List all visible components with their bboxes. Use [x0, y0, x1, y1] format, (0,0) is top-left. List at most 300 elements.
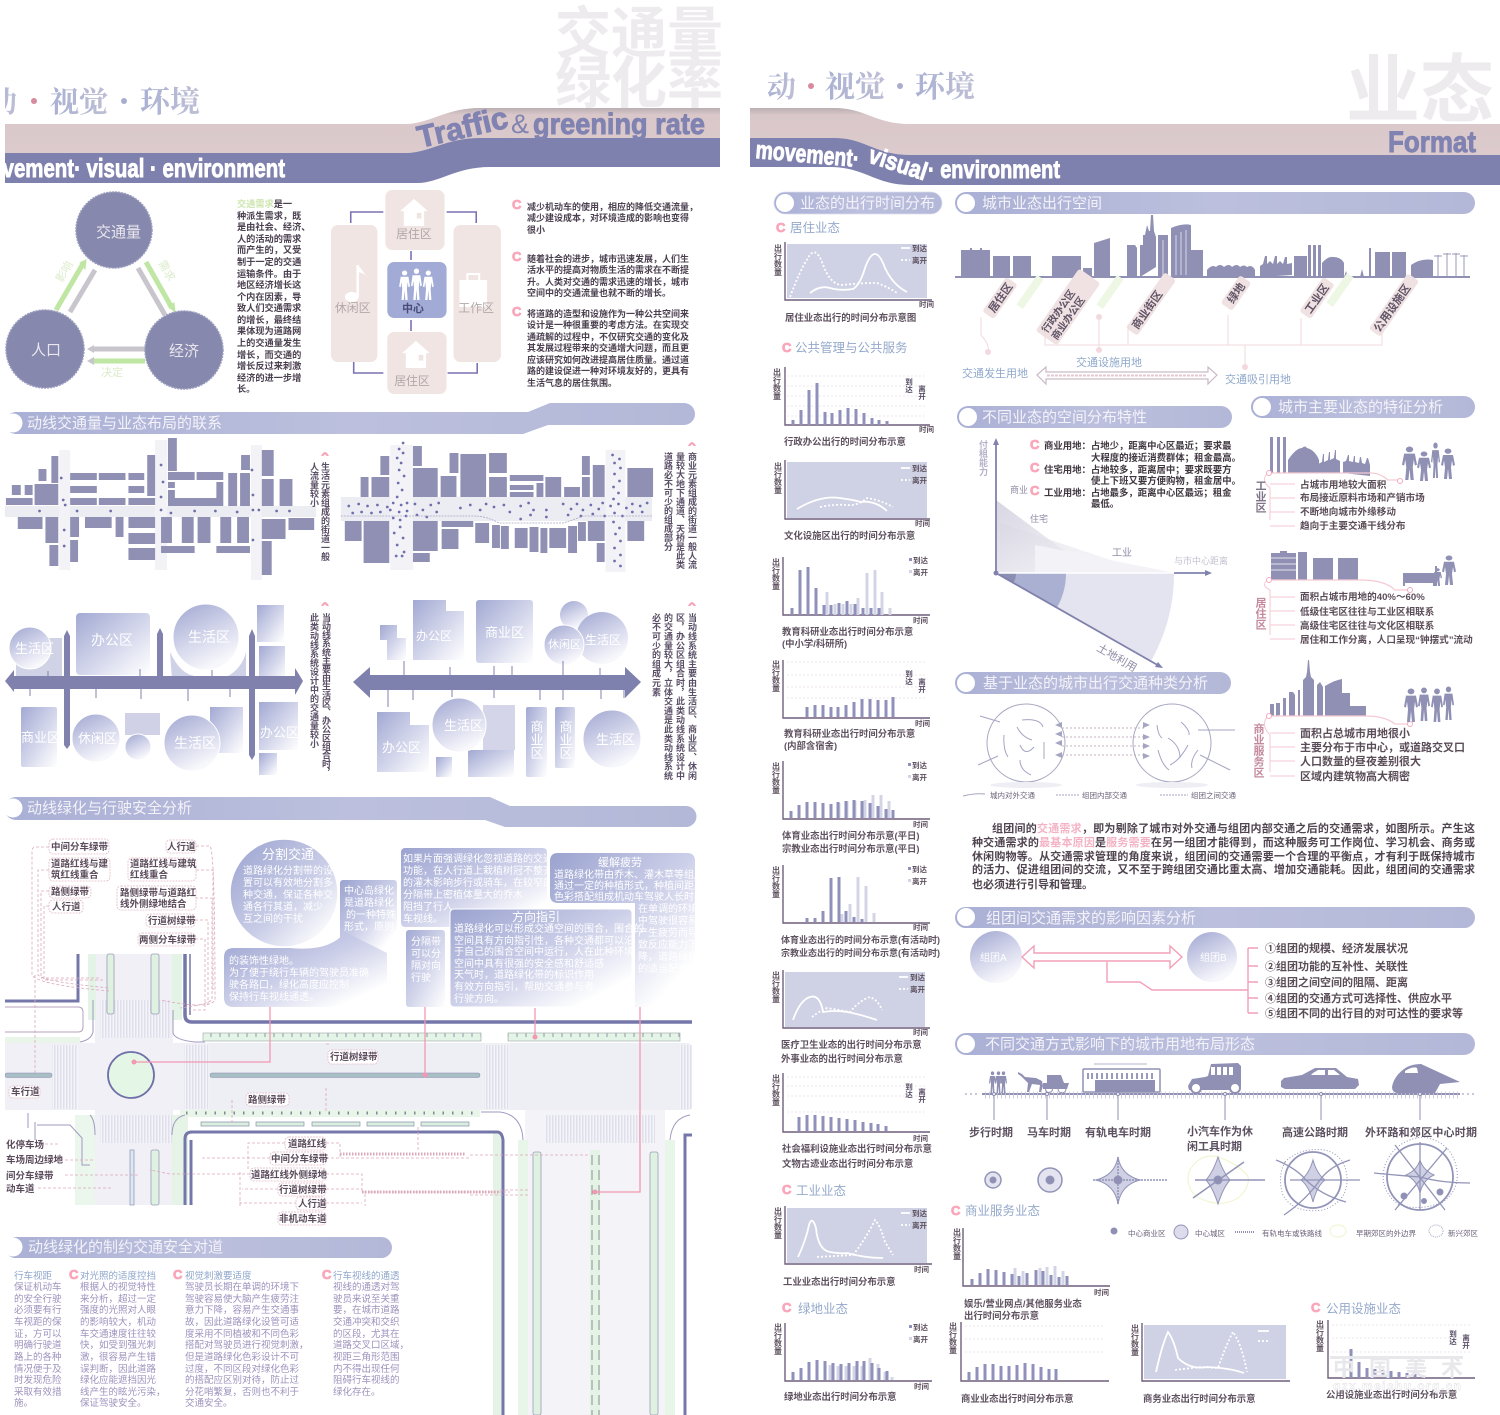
- road labels: 路侧绿带与道路红: [120, 887, 197, 899]
- banner left: greening rate: [533, 108, 705, 141]
- chart: public utilities: 到达: [1448, 1329, 1458, 1346]
- chart: culture facilities: 时间: [915, 518, 930, 528]
- chart: sport event: 出行数量: [772, 865, 780, 898]
- dashed leader lines: [32, 846, 590, 1218]
- chart: education with dorm: 教育科研业态出行时间分布示意: [784, 728, 915, 739]
- page title left: 动·视觉·环境: 视觉: [50, 86, 108, 119]
- timeline: transport eras: 步行时期: [969, 1125, 1013, 1139]
- text: traffic demand definition: 交通需求是一: [237, 198, 292, 209]
- paragraph: inter-cluster traffic demand: 休闲购物等。从交通需求管理的角度来说，组团间的交通需要一个合理的平衡点，才有利于既保持城市: [972, 849, 1475, 863]
- bullet text: right intro paragraphs: 升。人类对交通的需求迅速的增长，城市: [527, 276, 689, 287]
- text: moderate light control: 保证驾驶安全。: [80, 1397, 147, 1409]
- zoning diagram: commercial axis: 生活区: [596, 732, 635, 747]
- text: land use characteristics: 工业用地：占地最多，距离中心区最远；租金: [1044, 487, 1232, 499]
- chart: culture facilities: 出行数量: [774, 461, 782, 494]
- chart: social welfare: 到达: [904, 1082, 914, 1099]
- card: 缓解疲劳: 色彩搭配组成机动车驾驶人长时间: [554, 890, 704, 903]
- chart: bid-rent spatial distribution: 住宅: [1030, 513, 1048, 524]
- card: 中心岛 续: [224, 932, 387, 1007]
- text: clear sight lines: 视线的通透对驾: [333, 1281, 400, 1293]
- chart: residential travel time: 居住业态出行的时间分布示意图: [785, 312, 916, 323]
- chart: industry: [774, 1206, 932, 1287]
- bullet text: right intro paragraphs: 其发展过程带来的交通增大问题，而且更: [527, 342, 689, 353]
- chart: education with dorm: 到达: [904, 669, 914, 686]
- icon: tram: [1083, 1064, 1160, 1092]
- residential zone analysis: 面积占城市用地的40%～60%: [1300, 591, 1425, 603]
- text: sight distance: 必须要有行: [14, 1304, 62, 1316]
- card: 片面强调绿化: [401, 848, 553, 927]
- vertical note: commercial street: [663, 442, 697, 570]
- section heading: 组团间交通需求的影响因素分析: [955, 907, 1475, 928]
- chart: sport weekday: 时间: [913, 819, 928, 829]
- building lines: [5, 954, 692, 1415]
- tag: utilities: 公用设施区: [1370, 281, 1413, 334]
- bullet text: right intro paragraphs: 将道路的造型和设施作为一种公共空间来: [527, 308, 689, 319]
- chart: entertainment and services: 娱乐/营业网点/其他服务业态: [964, 1298, 1082, 1309]
- vertical note: commercial street: 商业元素组成的街道一般人流: [687, 451, 697, 570]
- chart: sport event: 体育业态出行的时间分布示意(有活动时): [781, 934, 940, 945]
- page title right: 动·视觉·环境: 视觉: [825, 71, 885, 104]
- tag: green: [1221, 275, 1251, 311]
- subhead: 公共管理与公共服务: 公共管理与公共服务: [795, 340, 908, 355]
- diagram: cluster A-B influence: 组团B: [1200, 951, 1227, 964]
- chart: education: (中小学/科研所): [782, 638, 847, 649]
- commercial zone analysis: 商业服务区: [1252, 722, 1264, 778]
- text: traffic demand definition: 而产生的，又受: [237, 244, 301, 255]
- chart: business: [1130, 1323, 1290, 1404]
- watermark: qzx.meishu.org.cn: [1333, 1379, 1461, 1393]
- chart: public utilities: 公用设施业态出行时间分布示意: [1326, 1389, 1457, 1400]
- vertical note: commercial axis: 必不可少的组成元素: [651, 612, 661, 697]
- text: traffic demand definition: 长。: [237, 383, 255, 394]
- card: 中心岛绿化: 中心岛绿化: [344, 884, 394, 897]
- icon: modern car: [1281, 1068, 1359, 1089]
- chart: public utilities: [1316, 1319, 1475, 1400]
- chart: residential travel time: [774, 242, 934, 323]
- chart: administrative office: 出行数量: [772, 367, 782, 400]
- card: 中心岛绿化: 是道路绿化: [344, 896, 394, 909]
- road labels: 动车道: [6, 1183, 35, 1195]
- road labels: 人行道: [52, 901, 81, 913]
- subhead: 公用设施业态: C: [1311, 1300, 1321, 1315]
- road labels: 人行道: [167, 841, 196, 853]
- chart: medical: 医疗卫生业态的出行时间分布示意: [781, 1039, 922, 1050]
- chart: public utilities: 离开: [1461, 1333, 1470, 1350]
- text: moderate visual stimulation: 分花哨繁复，否则也不利于: [185, 1386, 299, 1398]
- section heading: 不同交通方式影响下的城市用地布局形态: 不同交通方式影响下的城市用地布局形态: [985, 1035, 1255, 1053]
- diagram: cluster A-B influence: 组团A: [980, 951, 1007, 964]
- card: 分割交通: 通各行其道，减少: [243, 900, 323, 913]
- text: moderate visual stimulation: [173, 1267, 309, 1409]
- form: outer ring: [1374, 1137, 1470, 1210]
- section heading: 不同业态的空间分布特性: 不同业态的空间分布特性: [982, 409, 1147, 426]
- industrial zone analysis: 不断地向城市外缘移动: [1300, 506, 1396, 518]
- subhead: 公用设施业态: 公用设施业态: [1326, 1301, 1401, 1316]
- white mask below plan left: [0, 1206, 490, 1415]
- chart: culture facilities: [774, 460, 930, 541]
- chart: residential travel time: 到达: [912, 243, 927, 253]
- text: land use characteristics: 住宅用地：占地较多，距离居中；要求既要方: [1044, 464, 1232, 476]
- road labels: 中间分车绿带: [51, 841, 109, 853]
- diagram: traffic, population, economy triangle: 人口: [31, 342, 61, 359]
- vertical note: commercial street: 量较大地下通道、天桥是此类: [675, 452, 685, 570]
- section heading: 业态的出行时间分布: [774, 192, 942, 214]
- chart: green space: 时间: [914, 1381, 929, 1391]
- text: clear sight lines: 内不得出现任何: [333, 1363, 400, 1375]
- paragraph: inter-cluster traffic demand: [972, 821, 1475, 891]
- timeline: transport eras: 小汽车作为休: [1187, 1124, 1253, 1138]
- land use tags: [982, 268, 1419, 346]
- diagram: cluster A-B influence: ②组团功能的互补性、关联性: [1265, 959, 1408, 973]
- road labels: 中间分车绿带: [271, 1153, 329, 1165]
- tag: commercial street: 商业街区: [1129, 288, 1165, 332]
- timeline: transport eras: [965, 1063, 1477, 1153]
- card: 分隔带: 行驶: [411, 971, 431, 984]
- card: 方向指引: [450, 909, 644, 1007]
- diagram: cluster A-B influence: [970, 931, 1463, 1020]
- commercial zone analysis: [1252, 660, 1465, 783]
- road labels: 车行道: [11, 1086, 40, 1098]
- land use connection lines and labels: 交通吸引用地: [1225, 372, 1291, 386]
- road labels: 线外侧绿地结合: [120, 898, 187, 910]
- chart: sport weekday: 出行数量: [772, 761, 780, 794]
- road surface: [5, 954, 692, 1415]
- subhead: 绿地业态: [782, 1300, 848, 1316]
- chart: culture facilities: 文化设施区出行的时间分布示意: [784, 530, 915, 541]
- paragraph: inter-cluster traffic demand: 种交通需求的最基本原因是服务需要在另一组团才能得到，而这种服务可工作岗位、学习机会、商务或: [972, 835, 1475, 849]
- chart: commerce: [948, 1321, 1109, 1404]
- land use connection lines and labels: [962, 314, 1382, 386]
- chart: industry: 时间: [914, 1264, 929, 1274]
- paragraph: inter-cluster traffic demand: 也必须进行引导和管理。: [972, 877, 1093, 891]
- chart: entertainment and services: [952, 1227, 1110, 1321]
- land use connection lines and labels: 交通发生用地: [962, 366, 1028, 380]
- zoning diagram: commercial axis: 办公区: [416, 628, 452, 643]
- vertical note: residential street: [309, 452, 330, 562]
- text: moderate visual stimulation: 交通安全。: [185, 1397, 233, 1409]
- text: sight distance: 采取有效措: [14, 1386, 62, 1398]
- zoning diagram: living + office axis: 办公区: [260, 725, 299, 740]
- vertical note: commercial axis: 区，办公区组合时，此类动线系统设计中: [675, 613, 685, 781]
- card: 方向指引: 空间具有方向指引性，各种交通都可以沿: [454, 934, 634, 947]
- block plan: commercial street: [341, 443, 653, 572]
- card: 缓解疲劳: 产生疲劳而导: [638, 926, 698, 939]
- bullet text: right intro paragraphs: 设计是一种很重要的考虑方法。在实现交: [527, 319, 689, 330]
- paragraph: inter-cluster traffic demand: 的活力、促进组团间的交流，又不至于跨组团交通比重太高、增加交通能耗。因此，组团间的交通需求: [972, 862, 1475, 876]
- timeline: transport eras: 有轨电车时期: [1085, 1125, 1151, 1139]
- subhead: 工业业态: 工业业态: [796, 1184, 846, 1198]
- commercial zone analysis: 面积占总城市用地很小: [1300, 726, 1410, 740]
- chart: sport weekday: 离开: [912, 772, 927, 782]
- text: traffic demand definition: 致人们交通需求: [237, 302, 301, 313]
- text: moderate light control: 的影响较大，机动: [80, 1316, 156, 1328]
- chart: business: 出行数量: [1130, 1323, 1140, 1356]
- chart: social welfare: 社会福利设施业态出行时间分布示意: [782, 1143, 932, 1154]
- vertical note: residential street: 生活元素组成的街道一般: [320, 461, 330, 562]
- card: 片面强调绿化: 分隔带上密植体量大的乔木: [403, 888, 523, 901]
- card: 缓解疲劳: 在单调的环境: [638, 902, 698, 915]
- chart: education: [772, 555, 930, 649]
- card: 方向指引: 方向指引: [512, 909, 560, 924]
- banner right: · environment: [928, 156, 1061, 184]
- road plan: [5, 846, 692, 1415]
- zoning diagram: commercial axis: 生活区: [585, 633, 621, 647]
- ghost title: 交通量 绿化率: [555, 2, 723, 115]
- vertical note: commercial axis: [651, 602, 697, 781]
- card: 缓解疲劳: 道路绿化带由乔木、灌木草等组成: [554, 868, 704, 881]
- section heading: 动线绿化与行驶安全分析: [4, 797, 696, 827]
- text: sight distance: 行车视距: [14, 1270, 53, 1282]
- text: clear sight lines: 阻碍行车视线的: [333, 1374, 400, 1386]
- bullet text: right intro paragraphs: C: [512, 304, 522, 319]
- text: moderate light control: 快，如受到强光刺: [80, 1339, 156, 1351]
- text: clear sight lines: 道路交叉口区域，: [333, 1339, 409, 1351]
- card: 片面强调绿化: 阻挡了行人: [403, 900, 453, 913]
- road labels: 行道树绿带: [330, 1051, 378, 1063]
- text: moderate visual stimulation: 但是道路绿化色彩设计不可: [185, 1351, 299, 1363]
- diagram: cluster travel types: 城内对外交通: [990, 790, 1035, 800]
- card: 缓解疲劳: [550, 853, 704, 1007]
- chart: public utilities: 出行数量: [1316, 1319, 1324, 1352]
- chart: bid-rent spatial distribution: [978, 438, 1228, 675]
- chart: residential travel time: 离开: [912, 255, 927, 265]
- bullet text: right intro paragraphs: 生活气息的居住氛围。: [527, 377, 617, 388]
- card: 中心岛 续: 的装饰性绿地。: [229, 954, 299, 967]
- road labels: 筑红线重合: [51, 869, 99, 881]
- section heading: 动线绿化与行驶安全分析: 动线绿化与行驶安全分析: [27, 799, 192, 817]
- chart: residential travel time: 时间: [919, 299, 934, 309]
- paragraph: inter-cluster traffic demand: 组团间的交通需求，即为剔除了城市对外交通与组团内部交通之后的交通需求，如图所示。产生这: [992, 821, 1475, 835]
- text: sight distance: 证，方可以: [14, 1328, 62, 1340]
- text: moderate light control: 误判断，因此道路: [80, 1363, 157, 1375]
- text: traffic demand definition: 果体现为道路网: [237, 325, 301, 336]
- chart: administrative office: 行政办公出行的时间分布示意: [784, 436, 906, 447]
- zoning diagram: living + office axis: 休闲区: [78, 731, 117, 746]
- text: land use characteristics: 商业用地：占地少，距离中心区最近；要求最: [1044, 440, 1232, 452]
- chart: medical: 离开: [910, 984, 925, 994]
- zoning diagram: living + office axis: 商业区: [21, 730, 60, 745]
- section heading: 城市业态出行空间: [955, 192, 1475, 214]
- card: 分隔带: 可以分: [411, 948, 441, 960]
- right road fragments above mask: [493, 1206, 503, 1415]
- text: moderate visual stimulation: 驾驶容易使大脑产生疲劳注: [185, 1293, 300, 1305]
- chart: education: 时间: [913, 615, 928, 625]
- icon: high speed train: [1392, 1064, 1460, 1093]
- text: traffic demand definition: 制于一定的交通: [237, 256, 301, 267]
- text: clear sight lines: 行车视线的通透: [333, 1270, 400, 1282]
- banner right: Format: [1388, 126, 1476, 159]
- text: moderate light control: 线产生的眩光污染，: [80, 1386, 166, 1398]
- chart: administrative office: [772, 367, 934, 447]
- road labels: [6, 839, 378, 1225]
- text: traffic demand definition: 是由社会、经济、: [237, 221, 310, 232]
- card: 中心岛绿化: 的一种特殊: [346, 908, 396, 921]
- bullet text: right intro paragraphs: C: [512, 197, 522, 212]
- page title right: 动·视觉·环境: [767, 71, 975, 104]
- residential zone analysis: 高级住宅区往往与文化区相联系: [1300, 620, 1435, 632]
- chart: social welfare: 文物古迹业态出行时间分布示意: [782, 1158, 913, 1169]
- card: 片面强调绿化: 的灌木影响步行或骑车，在较窄的: [403, 876, 553, 889]
- chart: green space: 离开: [913, 1334, 928, 1344]
- road labels: 道路红线与建: [51, 858, 109, 870]
- card: 分隔带: [406, 930, 445, 1007]
- page title left: 动·视觉·环境: [5, 86, 200, 115]
- road labels: 道路红线: [288, 1138, 327, 1150]
- text: traffic demand definition: 上的交通量发生: [237, 337, 301, 348]
- text: sight distance: [14, 1270, 62, 1409]
- text: moderate visual stimulation: C: [173, 1267, 183, 1282]
- bullet text: right intro paragraphs: 路的建设促进一种对环境友好的，更具有: [527, 365, 689, 376]
- subhead: 商业服务业态: C: [951, 1203, 961, 1218]
- text: moderate light control: C: [69, 1267, 79, 1282]
- diagram: traffic, population, economy triangle: 交通量: [96, 223, 141, 241]
- chart: green space: 出行数量: [774, 1322, 782, 1355]
- section heading: 基于业态的城市出行交通种类分析: [955, 672, 1231, 694]
- text: moderate visual stimulation: 视觉刺激要适度: [185, 1270, 252, 1282]
- text: sight distance: 车视距的保: [14, 1316, 62, 1328]
- zoning diagram: commercial axis: 办公区: [382, 740, 421, 755]
- legend: city forms: 有轨电车或铁路线: [1262, 1228, 1322, 1238]
- chart: culture facilities: 离开: [912, 475, 927, 485]
- road labels: 非机动车道: [279, 1213, 327, 1225]
- text: sight distance: 的安全行驶: [14, 1293, 62, 1305]
- card: 缓解疲劳: 致反应能力下: [638, 938, 698, 951]
- text: traffic demand definition: 种派生需求，既: [237, 210, 301, 221]
- diagram: traffic, population, economy triangle: 经济: [169, 343, 199, 360]
- chart: sport weekday: 宗教业态出行时间分布示意(平日): [782, 843, 920, 854]
- chart: social welfare: 离开: [917, 1087, 926, 1104]
- chart: business: 商务业态出行时间分布示意: [1143, 1393, 1256, 1404]
- skyline: [955, 215, 1470, 277]
- section heading: 城市主要业态的特征分析: 城市主要业态的特征分析: [1278, 399, 1443, 416]
- section heading: 动线交通量与业态布局的联系: [4, 403, 695, 434]
- road labels: 道路红线外侧绿地: [251, 1169, 328, 1181]
- chart: education: 教育科研业态出行时间分布示意: [782, 626, 913, 637]
- pink callout leaders: [134, 1007, 640, 1192]
- vertical note: living + office: [309, 602, 331, 776]
- zoning diagram: commercial axis: 商业区: [528, 720, 544, 759]
- banner right: [750, 108, 1500, 186]
- watermark: [1330, 1356, 1463, 1393]
- road labels: 道路红线与建筑: [130, 858, 197, 870]
- industrial zone analysis: 占城市用地较大面积: [1300, 479, 1387, 491]
- card: 缓解疲劳: 缓解疲劳: [598, 855, 642, 869]
- section heading: 城市业态出行空间: 城市业态出行空间: [982, 195, 1102, 212]
- road labels: 化停车场: [6, 1139, 45, 1151]
- text: sight distance: 路上的各种: [14, 1351, 62, 1363]
- card: 分割交通: 置可以有效地分割多: [243, 876, 333, 889]
- tag: industry: 工业区: [1302, 281, 1332, 316]
- text: land use characteristics: C: [1030, 483, 1040, 498]
- text: land use characteristics: C: [1030, 460, 1040, 475]
- tag: commercial street: [1126, 272, 1176, 336]
- road labels: 车场周边绿地: [6, 1154, 64, 1166]
- subhead: 绿地业态: 绿地业态: [798, 1301, 848, 1316]
- chart: social welfare: 出行数量: [772, 1073, 780, 1106]
- section heading: 城市主要业态的特征分析: [1251, 396, 1475, 418]
- city form diagrams: [985, 1137, 1470, 1215]
- block plan: residential street: [5, 438, 316, 580]
- vertical note: residential street: 人流量较小: [309, 462, 319, 508]
- form: carriage city: [1038, 1168, 1062, 1192]
- text: moderate light control: 来分析，超过一定: [80, 1293, 157, 1305]
- timeline: transport eras: 闲工具时期: [1187, 1139, 1242, 1153]
- subhead: 居住业态: 居住业态: [790, 221, 840, 235]
- card: 方向指引: 天气时，道路绿化带的标识作用: [454, 968, 594, 981]
- text: traffic demand definition: 人的活动的需求: [237, 233, 301, 244]
- card: 分割交通: 道路绿化分割带的设: [243, 864, 333, 877]
- vertical note: commercial axis: 的交通量较大，立体交通是此类动线系统: [663, 612, 673, 781]
- text: moderate visual stimulation: 过度，不同区段对绿化色彩: [185, 1363, 300, 1375]
- green strips: [5, 954, 680, 1415]
- diagram: cluster travel types: [963, 704, 1236, 800]
- residential zone analysis: 居住区: [1254, 597, 1266, 630]
- bullet text: right intro paragraphs: 应该研究如何改进提高居住质量。通过道: [527, 354, 689, 365]
- text: land use characteristics: C: [1030, 437, 1040, 452]
- card: 方向指引: 行驶方向。: [454, 992, 504, 1005]
- legend: city forms: [1110, 1225, 1478, 1239]
- card: 缓解疲劳: 的适当配置可: [638, 962, 698, 975]
- diagram: cluster A-B influence: ③组团之间空间的阻隔、距离: [1265, 975, 1408, 989]
- card: 片面强调绿化: 如果片面强调绿化忽视道路的交通: [403, 852, 553, 865]
- zoning diagram: commercial axis: 商业区: [485, 625, 524, 640]
- bullet text: right intro paragraphs: [512, 197, 698, 388]
- card: 中心岛绿化: 形式，原则: [344, 920, 394, 933]
- text: moderate visual stimulation: 度采用不同植被和不同色彩: [185, 1328, 300, 1340]
- chart: bid-rent spatial distribution: 与市中心距离: [1174, 555, 1228, 566]
- section heading: 组团间交通需求的影响因素分析: 组团间交通需求的影响因素分析: [986, 909, 1196, 927]
- chart: industry: 到达: [912, 1208, 927, 1218]
- ghost title: 交通量 绿化率: 交通量: [555, 2, 723, 65]
- subhead: 居住业态: C: [776, 220, 786, 235]
- chart: sport event: 到达: [912, 864, 927, 874]
- industrial zone analysis: 趋向于主要交通干线分布: [1300, 520, 1406, 532]
- tag: offices: [1036, 268, 1100, 346]
- zoning diagram: commercial axis: 商业区: [558, 720, 572, 759]
- zoning diagram: living + office axis: [5, 604, 303, 775]
- text: moderate light control: 根据人的视觉特性: [80, 1281, 157, 1293]
- chart: entertainment and services: 时间: [1094, 1287, 1110, 1297]
- bullet text: right intro paragraphs: 很小: [527, 224, 545, 235]
- text: traffic demand definition: 增长，而交通的: [237, 349, 301, 360]
- page title left: 动·视觉·环境: 环境: [140, 86, 200, 119]
- section heading: 业态的出行时间分布: 业态的出行时间分布: [800, 195, 935, 212]
- card: 方向指引: 空间中具有很强的安全感和舒适感: [454, 957, 604, 970]
- text: sight distance: 情况便于及: [14, 1363, 62, 1375]
- timeline: transport eras: 外环路和郊区中心时期: [1365, 1125, 1477, 1139]
- road labels: 行道树绿带: [148, 915, 196, 927]
- subhead: 商业服务业态: 商业服务业态: [965, 1203, 1040, 1218]
- diagram: cluster A-B influence: ④组团的交通方式可选择性、供应水平: [1265, 991, 1452, 1005]
- text: traffic demand definition: 增长反过来刺激: [237, 360, 301, 371]
- tag: residential: [982, 277, 1018, 319]
- text: land use characteristics: 大程度的接近消费群体；租金最高。: [1091, 452, 1241, 464]
- bullet text: right intro paragraphs: C: [512, 249, 522, 264]
- residential zone analysis: 居住和工作分离，人口呈现“钟摆式”流动: [1300, 634, 1473, 646]
- banner left: [5, 108, 720, 183]
- text: traffic demand definition: 地区经济增长这: [237, 279, 301, 290]
- zoning diagram: living + office axis: 生活区: [174, 735, 216, 751]
- zoning diagram: living + office axis: 生活区: [15, 641, 54, 656]
- section heading: 不同交通方式影响下的城市用地布局形态: [955, 1033, 1475, 1055]
- text: moderate light control: [69, 1267, 166, 1409]
- chart: sport event: [772, 864, 940, 958]
- chart: education with dorm: 时间: [915, 718, 930, 728]
- zoning diagram: commercial axis: 生活区: [444, 718, 483, 733]
- text: moderate visual stimulation: 的搭配应区别对待，防止过: [185, 1374, 300, 1386]
- text: clear sight lines: 交通冲突和交织: [333, 1316, 400, 1328]
- vertical note: living + office: 当动线系统主要由生活区、办公区组合时，: [321, 612, 331, 776]
